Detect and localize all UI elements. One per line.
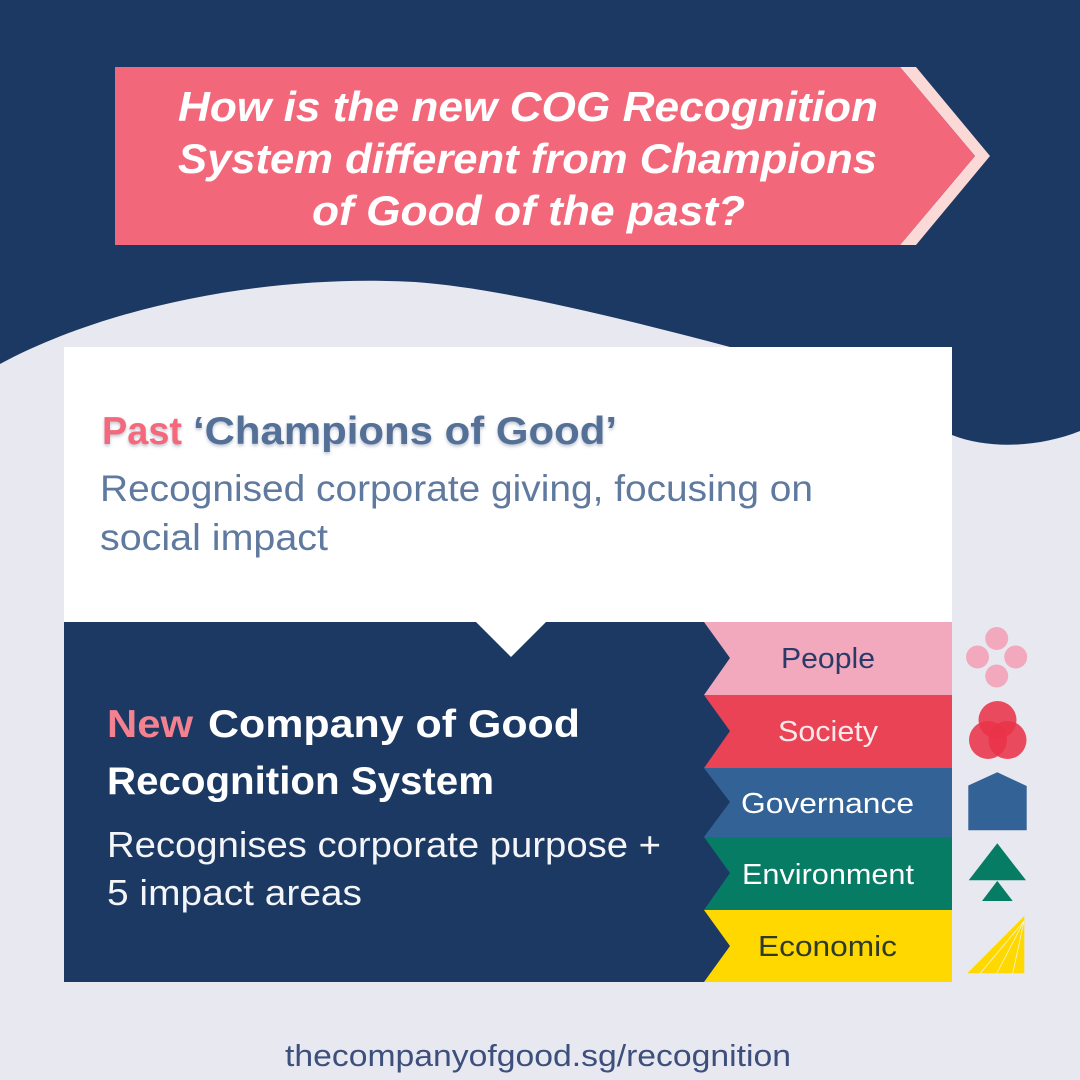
ribbon: environment: Environment [742,859,914,891]
ribbon: governance [704,768,952,837]
past description: social impact [100,517,329,558]
icon: governance house [968,772,1027,830]
ribbon: society [704,695,952,768]
pointer notch [476,622,546,657]
banner arrow edge [900,67,990,245]
icon: environment tree [969,843,1026,901]
new description: 5 impact areas [107,872,362,913]
ribbon: economic [704,910,952,982]
panel: new recognition system [64,622,731,982]
new description [107,824,661,913]
past description: Recognised corporate giving, focusing on [100,468,813,509]
navy wave background [0,0,1080,445]
new heading: Company of Good [208,703,580,746]
icon: people circles [966,627,1027,688]
new heading: Recognition System [107,760,494,803]
banner heading: How is the new COG Recognition [178,83,878,130]
new description: Recognises corporate purpose + [107,824,661,865]
past heading: Past [102,410,182,453]
ribbon: governance: Governance [741,788,914,820]
new heading: New [107,703,194,746]
past heading: ‘Champions of Good’ [193,410,617,453]
ribbon: society: Society [778,716,879,748]
ribbon: environment [704,837,952,910]
ribbon: people: People [781,643,875,675]
banner arrow body [115,67,975,245]
banner heading: System different from Champions [178,135,877,182]
panel: past champions of good [64,347,952,623]
ribbon: economic: Economic [758,931,897,963]
impact area ribbons [704,622,952,982]
footer url: thecompanyofgood.sg/recognition [285,1038,791,1073]
icon: society overlapping circles [969,701,1026,759]
ribbon: people [704,622,952,695]
new heading [107,703,580,803]
title banner [115,67,990,245]
banner heading [178,83,878,234]
icon: economic rays [967,916,1024,974]
banner heading: of Good of the past? [312,187,745,234]
past description [100,468,813,558]
